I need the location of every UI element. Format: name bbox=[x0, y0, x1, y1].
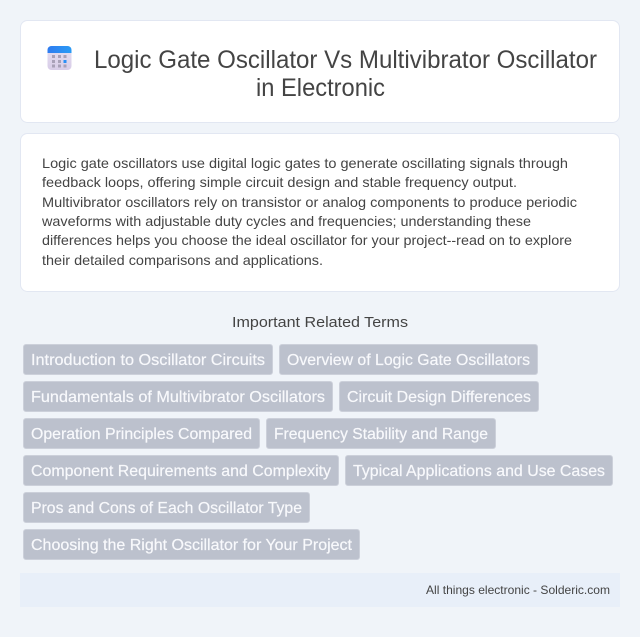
tag: circuit design: Circuit Design Differences bbox=[347, 389, 531, 406]
tag: fundamentals: Fundamentals of Multivibrator Oscillators bbox=[31, 389, 325, 406]
icon: calendar bbox=[48, 46, 72, 70]
tag: frequency stability bbox=[266, 418, 496, 448]
tag: component requirements bbox=[24, 456, 338, 486]
tag: choosing oscillator: Choosing the Right Oscillator for Your Project bbox=[31, 537, 353, 554]
text block: description: differences helps you choose the ideal oscillator for your project--read on to explore bbox=[42, 232, 572, 248]
tag: overview bbox=[280, 344, 538, 374]
tag: typical applications: Typical Applications and Use Cases bbox=[353, 463, 605, 480]
text block: description bbox=[41, 155, 577, 268]
footer bbox=[20, 573, 620, 607]
panel: header card bbox=[20, 20, 620, 122]
panel: related term tags bbox=[24, 344, 612, 560]
tag: typical applications bbox=[346, 456, 612, 486]
title: Logic Gate Oscillator Vs Multivibrator Oscillator bbox=[94, 46, 597, 74]
title bbox=[94, 46, 597, 102]
tag: operation principles bbox=[24, 418, 260, 448]
text block: description: Logic gate oscillators use digital logic gates to generate oscillating signals through bbox=[42, 155, 568, 171]
tag: component requirements: Component Requirements and Complexity bbox=[31, 463, 331, 480]
tag: circuit design bbox=[340, 382, 538, 412]
tag: overview: Overview of Logic Gate Oscillators bbox=[287, 352, 530, 369]
tag: fundamentals bbox=[24, 382, 332, 412]
text block: description: feedback loops, offering simple circuit design and stable frequency output. bbox=[42, 174, 517, 190]
tag: introduction: Introduction to Oscillator Circuits bbox=[31, 352, 265, 369]
tag: introduction bbox=[24, 344, 272, 374]
tag: frequency stability: Frequency Stability and Range bbox=[274, 426, 488, 443]
text block: description: their detailed comparisons and applications. bbox=[42, 252, 323, 268]
text block: description: Multivibrator oscillators rely on transistor or analog components to produce periodic bbox=[42, 194, 577, 210]
tag: pros and cons: Pros and Cons of Each Oscillator Type bbox=[31, 500, 302, 517]
title: in Electronic bbox=[256, 74, 385, 102]
tag: choosing oscillator bbox=[24, 530, 360, 560]
footer: All things electronic - Solderic.com bbox=[426, 583, 610, 597]
heading: important related terms: Important Related Terms bbox=[232, 314, 408, 331]
tag: operation principles: Operation Principles Compared bbox=[31, 426, 252, 443]
panel: description card bbox=[20, 134, 620, 292]
text block: description: waveforms with adjustable duty cycles and frequencies; understanding these bbox=[41, 213, 531, 229]
tag: pros and cons bbox=[24, 492, 310, 522]
